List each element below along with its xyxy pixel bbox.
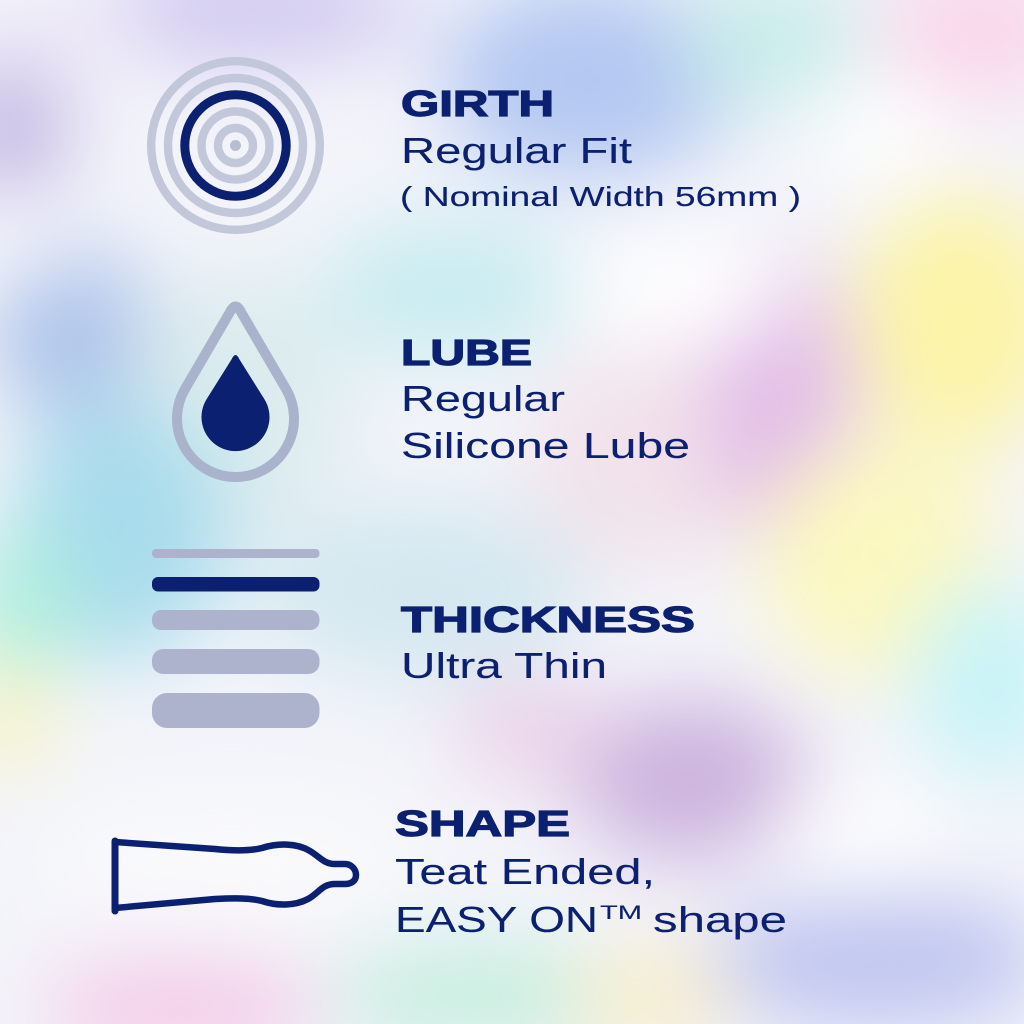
icon: girth concentric rings <box>151 61 320 230</box>
text: regular fit: Regular Fit <box>401 130 632 171</box>
icon: lube drop <box>177 306 294 477</box>
heading: thickness: THICKNESS <box>401 599 695 640</box>
text: silicone lube: Silicone Lube <box>401 425 690 466</box>
text: nominal width: ( Nominal Width 56mm ) <box>400 181 801 212</box>
heading: lube: LUBE <box>401 332 532 373</box>
text: easy on trademark shape <box>395 899 787 940</box>
text: easy on trademark shape: EASY ON <box>395 899 598 940</box>
text: ultra thin: Ultra Thin <box>401 645 607 686</box>
text: easy on trademark shape: TM <box>600 903 642 924</box>
icon: thickness bars <box>152 549 320 728</box>
heading: girth: GIRTH <box>401 83 554 124</box>
text: easy on trademark shape: shape <box>653 899 787 940</box>
text: teat ended: Teat Ended, <box>395 851 655 892</box>
heading: shape: SHAPE <box>395 803 570 844</box>
icon: shape outline <box>115 841 356 911</box>
text: regular: Regular <box>401 378 565 419</box>
